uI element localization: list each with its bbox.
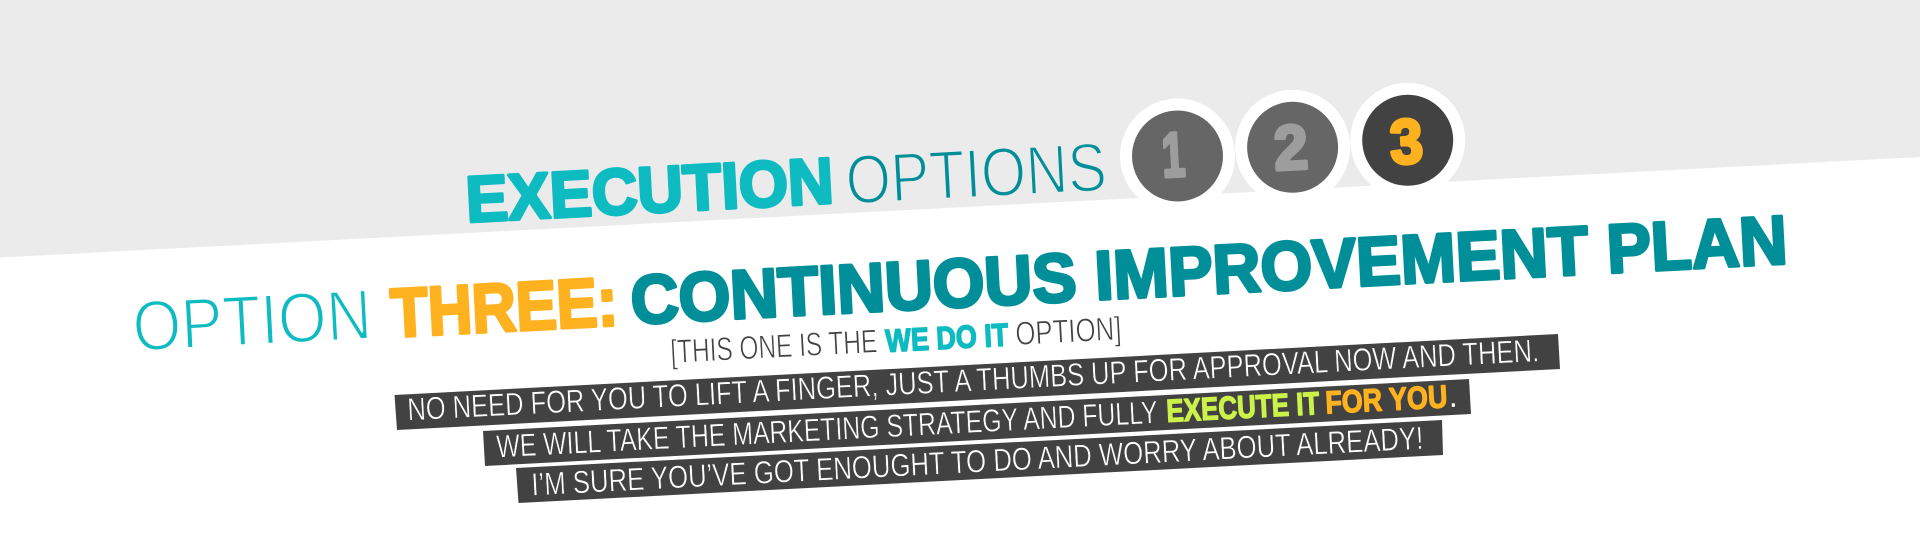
text strip 2: EXECUTE IT [1165, 385, 1321, 429]
text strip 1: NO NEED FOR YOU TO LIFT A FINGER, JUST A THUMBS UP FOR APPROVAL NOW AND THEN. [406, 332, 1540, 427]
heading word: execution: EXECUTION [464, 144, 835, 236]
step 2 badge: 2 [1272, 112, 1310, 184]
title word: three: THREE: [389, 263, 619, 352]
text strip 2: FOR YOU [1324, 378, 1448, 421]
title words: continuous improvement plan: CONTINUOUS IMPROVEMENT PLAN [629, 201, 1789, 339]
heading: execution options [464, 128, 1108, 236]
subtitle emphasis: WE DO IT [884, 317, 1010, 359]
text strip 1 [394, 332, 1560, 430]
step 1 badge [1120, 98, 1235, 214]
step indicators 1 2 3 [1120, 83, 1465, 214]
title: option three continuous improvement plan [131, 201, 1789, 367]
step 3 badge active [1350, 83, 1465, 198]
heading word: options: OPTIONS [844, 128, 1108, 219]
panel: gray slanted header background [0, 0, 1920, 258]
title word: option: OPTION [131, 276, 374, 367]
step 3 badge active: 3 [1388, 106, 1425, 178]
subtitle: this one is the we do it option [669, 309, 1122, 370]
subtitle lead text: [THIS ONE IS THE [669, 322, 878, 370]
text strip 2: . [1447, 378, 1458, 414]
step 1 badge: 1 [1160, 120, 1187, 191]
step 2 badge [1235, 90, 1350, 205]
text strip 2: WE WILL TAKE THE MARKETING STRATEGY AND FULLY [495, 394, 1158, 464]
text strip 3: I’M SURE YOU’VE GOT ENOUGHT TO DO AND WORRY ABOUT ALREADY! [530, 420, 1424, 502]
subtitle end text: OPTION] [1014, 309, 1122, 352]
